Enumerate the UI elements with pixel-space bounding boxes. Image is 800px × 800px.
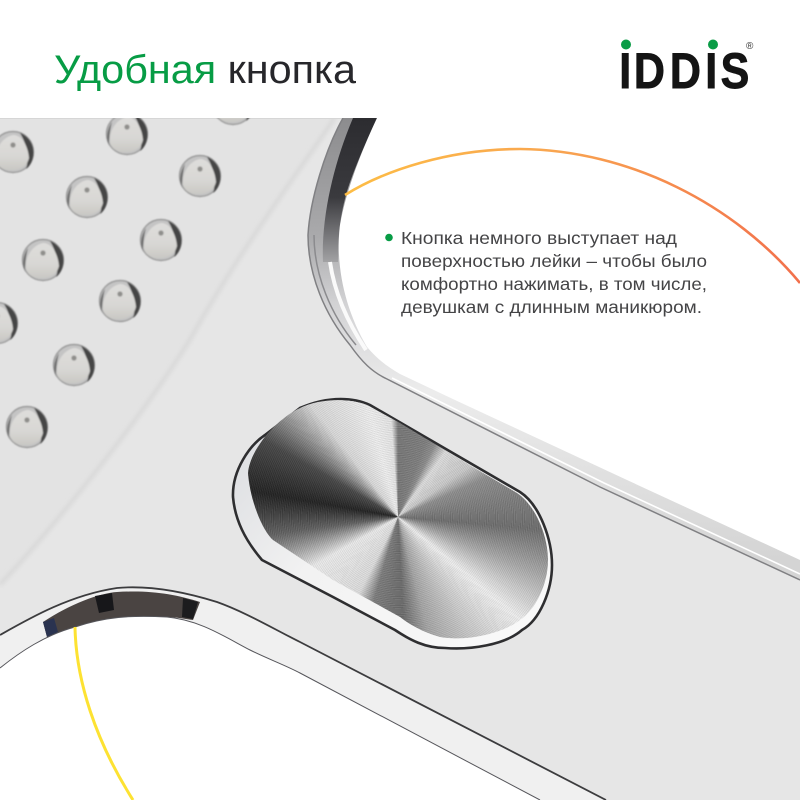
chrome rim: upper right — [308, 118, 800, 580]
button: metal face with radial brushed finish — [248, 400, 548, 638]
text block: button description: Кнопка немного выступает над — [401, 228, 677, 248]
heading: Удобная кнопка — [54, 48, 357, 92]
logo: IDDIS: ® — [746, 41, 754, 52]
button: chrome bezel — [233, 399, 552, 648]
white background: top right cutout — [339, 118, 800, 560]
text block: button description: девушкам с длинным маникюром. — [401, 297, 702, 317]
chrome rim: bottom — [0, 587, 606, 800]
logo: IDDIS: IDDIS — [619, 43, 749, 99]
text block: button description: поверхностью лейки – чтобы было — [401, 251, 707, 271]
callout line: yellow arc — [75, 627, 133, 800]
nozzles: spray jets — [0, 118, 250, 449]
white background: bottom cutout — [0, 616, 540, 800]
bullet — [385, 234, 393, 241]
callout line: orange arc — [345, 149, 800, 283]
text block: button description — [401, 228, 707, 317]
text block: button description: комфортно нажимать, в том числе, — [401, 274, 707, 294]
